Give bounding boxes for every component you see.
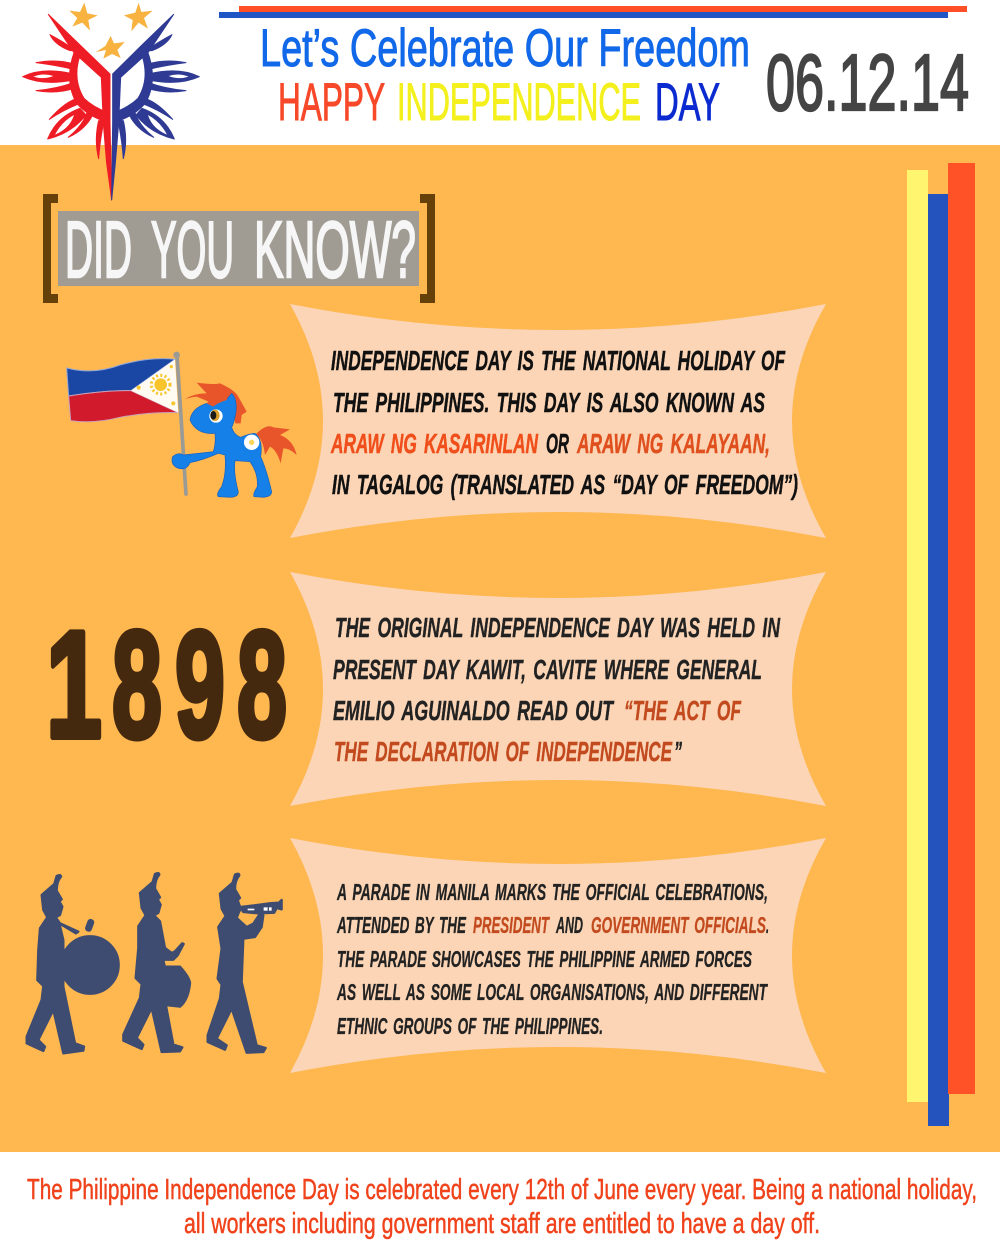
panel text: ARAW NG KASARINLAN	[330, 428, 538, 459]
bass drummer	[27, 875, 119, 1053]
panel text	[333, 612, 780, 767]
panel text: AND	[555, 912, 583, 938]
illustration: marching band silhouettes	[27, 873, 282, 1053]
flag	[67, 359, 178, 422]
flag colour stripes	[907, 163, 975, 1126]
panel text: GOVERNMENT OFFICIALS	[591, 912, 766, 938]
title line: happy independence day: DAY	[655, 73, 720, 132]
title	[260, 19, 750, 132]
panel text: OR	[546, 428, 569, 459]
title line: celebrate freedom: Let’s Celebrate Our Freedom	[260, 19, 750, 78]
panel text: EMILIO AGUINALDO READ OUT	[333, 695, 615, 726]
panel text	[336, 879, 769, 1039]
illustration: pony with flag	[67, 352, 297, 497]
panel text: ARAW NG KALAYAAN,	[576, 428, 770, 459]
trumpeter	[208, 874, 282, 1053]
year 1898: 8	[112, 600, 162, 770]
panel: parade: .	[766, 912, 769, 938]
panel: independence day	[290, 304, 826, 538]
year 1898: 9	[175, 600, 225, 770]
panel text	[330, 345, 798, 500]
panel text: ATTENDED BY THE	[336, 912, 466, 938]
icon: Philippine sun logo	[23, 3, 199, 200]
year 1898: 1	[46, 600, 102, 770]
panel: original independence day	[290, 572, 826, 806]
heading: did you know: KNOW?	[254, 205, 416, 294]
heading: did you know: YOU	[151, 205, 234, 294]
year 1898: 8	[237, 600, 287, 770]
panel text: ”	[674, 736, 682, 767]
panel text: “THE ACT OF	[624, 695, 742, 726]
flag pole	[173, 352, 186, 494]
heading: did you know	[43, 194, 435, 303]
panel: parade	[290, 838, 826, 1073]
panel text: PRESENT DAY KAWIT, CAVITE WHERE GENERAL	[333, 654, 762, 685]
footer note	[27, 1174, 977, 1240]
panel text: ETHNIC GROUPS OF THE PHILIPPINES.	[337, 1013, 603, 1039]
title line: happy independence day: INDEPENDENCE	[397, 73, 641, 132]
heading: did you know: DID	[65, 205, 132, 294]
pony	[172, 383, 297, 497]
logo stars	[69, 3, 153, 59]
logo red half	[23, 14, 112, 200]
panel text: PRESIDENT	[473, 912, 550, 938]
year 1898	[46, 600, 287, 770]
panel text: THE DECLARATION OF INDEPENDENCE	[334, 736, 673, 767]
snare drummer	[123, 873, 190, 1052]
title line: happy independence day	[278, 73, 720, 132]
title line: happy independence day: HAPPY	[278, 73, 385, 132]
header accent bars	[219, 6, 967, 18]
logo blue half	[112, 14, 199, 200]
